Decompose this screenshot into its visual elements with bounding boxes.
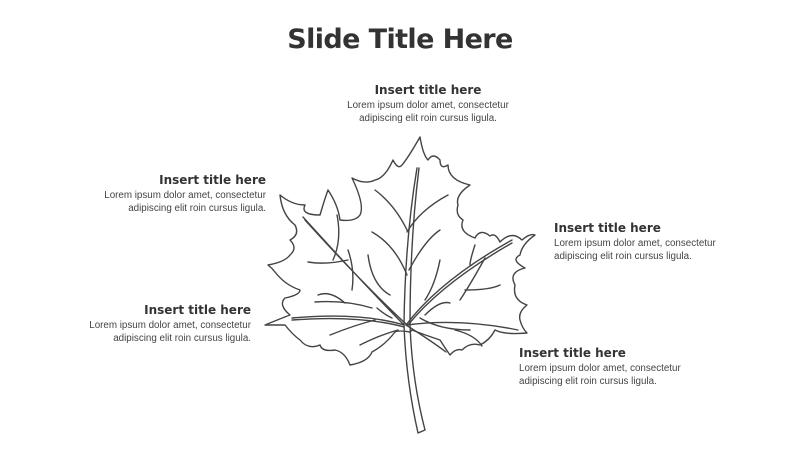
main veins	[303, 217, 406, 325]
side veins	[308, 190, 500, 346]
text block: top: adipiscing elit roin cursus ligula.	[359, 112, 497, 124]
stem and midrib	[404, 168, 425, 433]
text block: lower left: Lorem ipsum dolor amet, consectetur	[89, 320, 251, 331]
text block: upper right: Lorem ipsum dolor amet, consectetur	[554, 238, 716, 249]
leaf outline	[265, 137, 535, 365]
text block: upper left: adipiscing elit roin cursus ligula.	[128, 202, 266, 214]
text block: lower right: Lorem ipsum dolor amet, consectetur	[519, 363, 681, 374]
text block: lower left: Insert title here	[144, 303, 251, 317]
text block: top: Lorem ipsum dolor amet, consectetur	[347, 100, 509, 111]
title: Slide Title Here	[287, 24, 513, 55]
text block: upper left: Insert title here	[159, 173, 266, 187]
text block: top: Insert title here	[375, 83, 481, 97]
text block: lower left: adipiscing elit roin cursus ligula.	[113, 332, 251, 344]
text block: upper left	[104, 173, 266, 214]
text block: lower right	[519, 346, 681, 386]
text block: upper right: adipiscing elit roin cursus ligula.	[554, 250, 692, 262]
text block: upper right	[554, 221, 716, 262]
text block: top	[347, 83, 509, 124]
text block: upper left: Lorem ipsum dolor amet, consectetur	[104, 190, 266, 201]
text block: lower right: adipiscing elit roin cursus ligula.	[519, 376, 657, 386]
text block: lower left	[89, 303, 251, 344]
text block: lower right: Insert title here	[519, 346, 626, 360]
text block: upper right: Insert title here	[554, 221, 661, 235]
